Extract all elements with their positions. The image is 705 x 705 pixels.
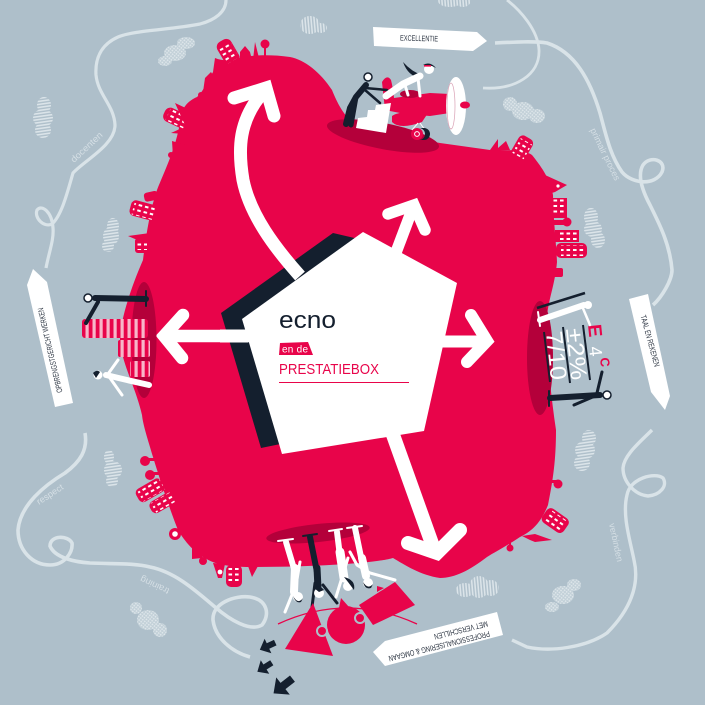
- white figure: [538, 301, 592, 326]
- arrow bottom right: [392, 432, 460, 553]
- heads: [293, 577, 373, 602]
- rope labels: [35, 126, 625, 596]
- left arrow shaft over pentagon: [220, 330, 248, 342]
- title block: [279, 307, 409, 383]
- numbers: 7/10: [541, 330, 572, 381]
- scene left: stacks and figures: [82, 282, 156, 398]
- shadow ellipse: [265, 519, 371, 547]
- prestatiebox heading: PRESTATIEBOX: [279, 361, 379, 378]
- numbers: ±2%: [561, 327, 592, 381]
- arrow top right: [388, 205, 425, 255]
- puzzle triangle: [285, 603, 333, 656]
- rope: verbinden: [512, 430, 665, 649]
- rope labels: verbinden: [607, 522, 625, 563]
- label: taal en rekenen: TAAL EN REKENEN: [639, 314, 661, 368]
- label: professionalisering: MET VERSCHILLEN: [433, 619, 489, 641]
- en de text: en de: [282, 344, 308, 356]
- label: professionalisering: PROFESSIONALISERING & OMGAAN: [387, 629, 491, 663]
- en de flag: [279, 342, 313, 355]
- rope: respect and training: [18, 433, 266, 657]
- rope labels: training: [139, 574, 171, 596]
- skyline buildings: [128, 37, 587, 587]
- red blob: [120, 55, 557, 578]
- rope labels: respect: [35, 482, 66, 507]
- numbers: E: [583, 323, 605, 338]
- scene bottom: hanging figures and puzzle: [265, 519, 417, 656]
- puzzle square: [359, 582, 415, 625]
- numbers: C: [597, 357, 613, 368]
- scene right: numbers and figures: [527, 293, 613, 415]
- label: excellentie: EXCELLENTIE: [400, 34, 438, 43]
- dark figure: [549, 372, 611, 406]
- scene top: airplane and figures: [325, 62, 470, 160]
- skyline white dots: [172, 184, 560, 574]
- figure bar: [537, 293, 585, 308]
- rope: docenten: [36, 0, 226, 268]
- shadow ellipse: [325, 112, 441, 160]
- heading rule: [279, 382, 409, 383]
- white pentagon: [242, 232, 457, 454]
- white figure: [94, 360, 149, 395]
- balance arc: [278, 608, 417, 624]
- dark shadow pentagon: [221, 233, 363, 448]
- label: excellentie: [373, 27, 487, 51]
- white figure climbing: [386, 62, 436, 96]
- stairs: [356, 103, 391, 133]
- airplane: [382, 77, 470, 140]
- dark figure: [84, 291, 146, 323]
- arrow right: [440, 315, 487, 362]
- numbers: [541, 323, 613, 381]
- stripe stacks: [82, 319, 150, 377]
- rope: primair proces: [495, 42, 672, 305]
- dark arrows bottom: [253, 635, 299, 702]
- rope: excellentie top: [483, 0, 539, 88]
- rope labels: docenten: [69, 130, 105, 164]
- clouds: [33, 0, 605, 637]
- ecno logo text: ecno: [279, 307, 336, 334]
- rope labels: primair proces: [588, 126, 622, 183]
- arrow left: [164, 315, 250, 358]
- figures hanging: [278, 526, 395, 612]
- shadow ellipse: [132, 282, 156, 398]
- shadow ellipse: [527, 301, 553, 415]
- bars: [544, 325, 590, 383]
- numbers: 4: [585, 345, 606, 357]
- puzzle circle: [327, 606, 365, 644]
- label: professionalisering: [373, 612, 503, 666]
- label: opbrengstgericht werken: OPBRENGSTGERICHT WERKEN: [36, 307, 64, 394]
- label: taal en rekenen: [629, 294, 670, 410]
- dark figure pushing: [346, 73, 387, 125]
- curved arrow top left: [234, 88, 300, 276]
- puzzle knobs: [317, 626, 327, 636]
